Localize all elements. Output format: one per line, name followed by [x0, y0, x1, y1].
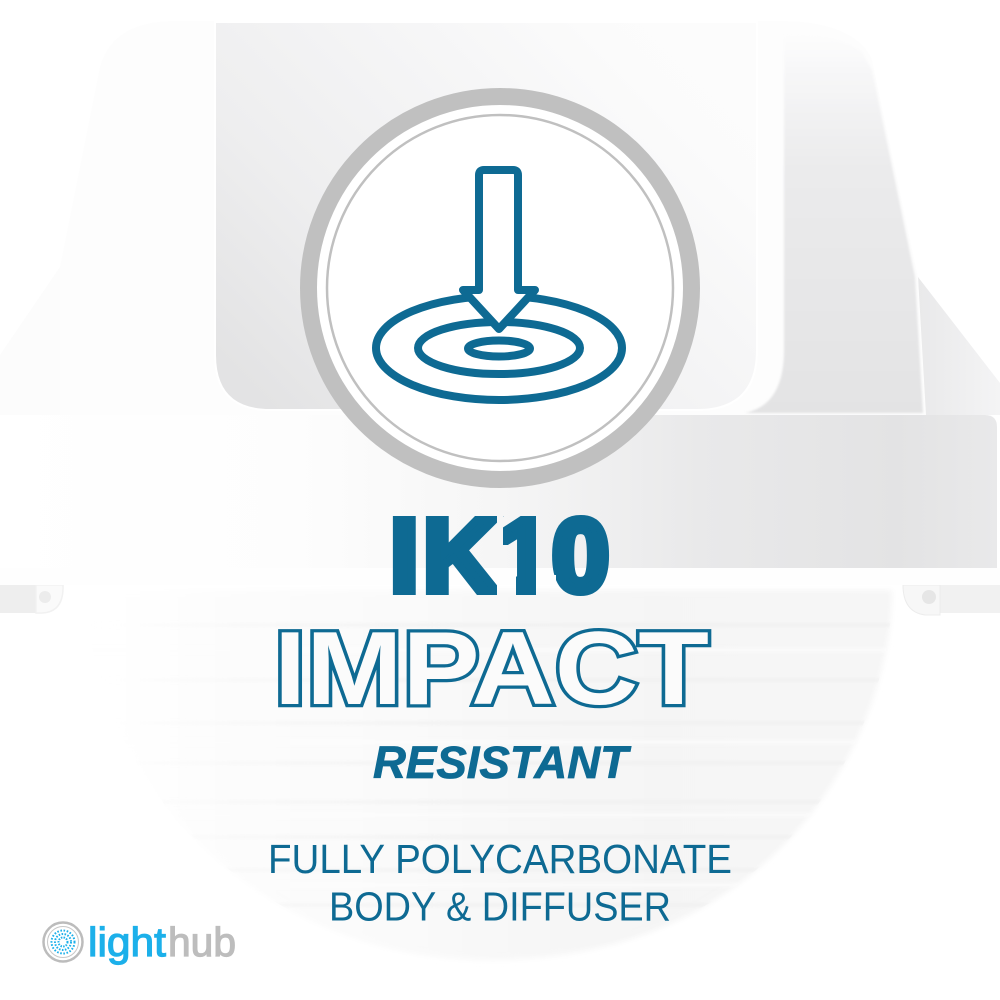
- subheading: RESISTANT: RESISTANT: [373, 737, 632, 788]
- logo wordmark: light: [88, 919, 167, 965]
- logo mark: [44, 922, 82, 962]
- description text: FULLY POLYCARBONATE: [268, 836, 732, 882]
- icon: target ellipses: [376, 296, 622, 400]
- logo: lighthub: [44, 919, 236, 965]
- description text: BODY & DIFFUSER: [329, 884, 671, 930]
- logo: lighthub: hub: [168, 919, 236, 965]
- icon badge: impact target with arrow: [308, 96, 692, 480]
- left clip: [0, 585, 63, 613]
- badge inner ring: [327, 115, 673, 461]
- heading: IMPACT outline: IMPACT: [274, 611, 709, 727]
- fixture upper body: [60, 21, 926, 415]
- badge outer ring: [308, 96, 692, 480]
- icon: down arrow: [463, 170, 535, 329]
- fixture base band: [0, 415, 997, 568]
- fixture recessed panel: [215, 22, 757, 410]
- band lip: [0, 568, 1000, 585]
- dome diffuser: [326, 592, 890, 951]
- right body shading: [745, 34, 923, 413]
- description text: [268, 836, 732, 930]
- right side wing: [918, 277, 1000, 415]
- heading: IK10: IK10: [390, 498, 609, 613]
- left side wing: [0, 267, 60, 415]
- right clip: [903, 585, 1000, 615]
